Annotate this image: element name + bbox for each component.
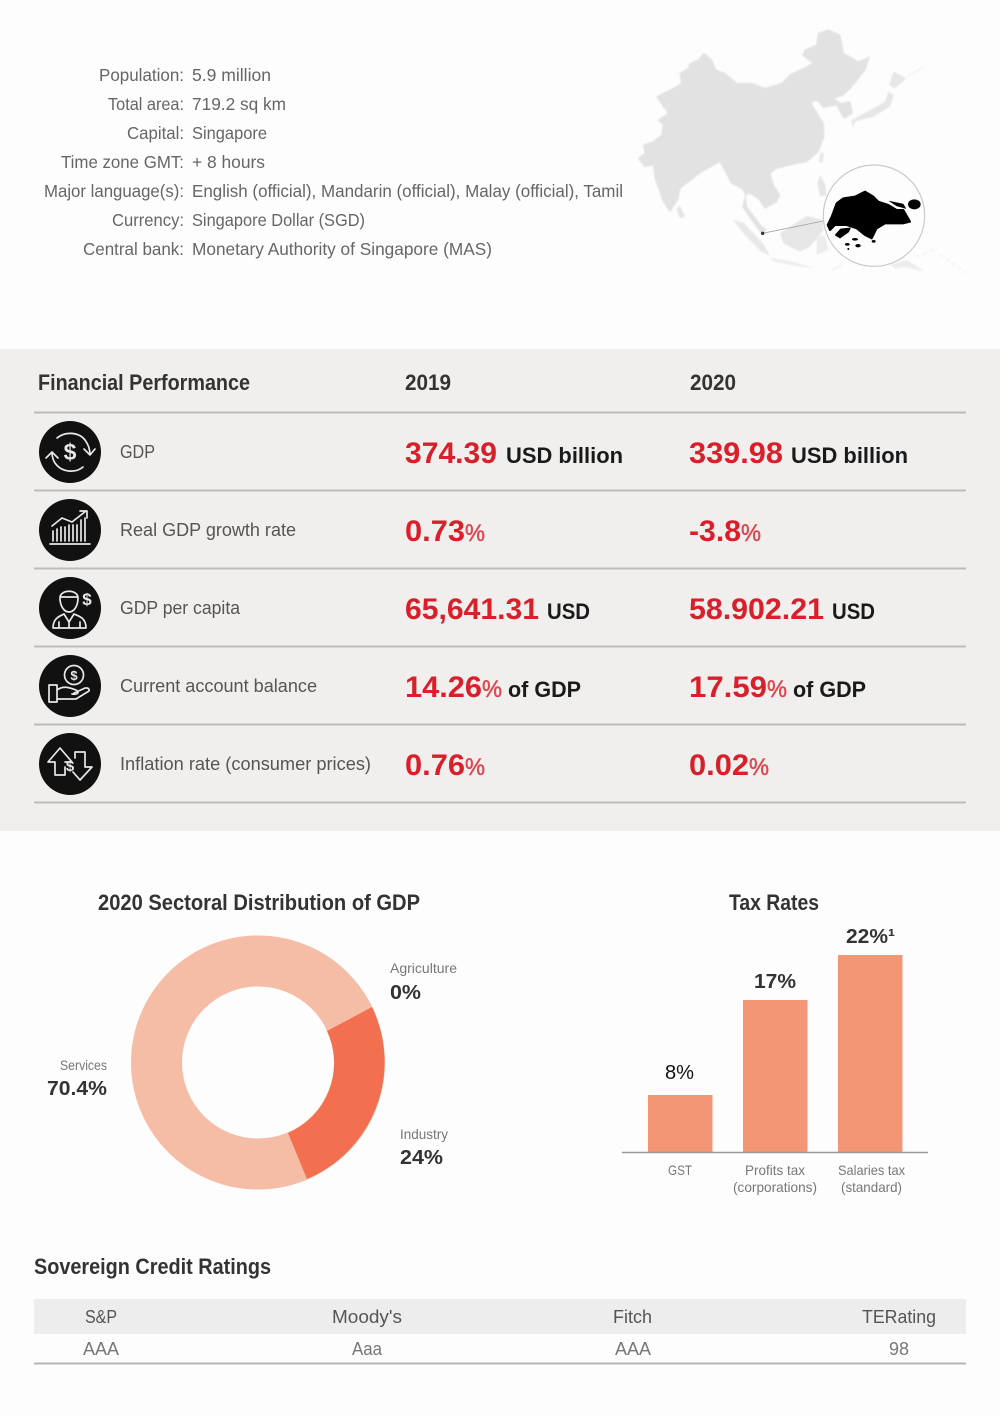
table header: Financial Performance [38, 370, 250, 395]
donut labels: Industry [400, 1126, 448, 1142]
row: real GDP growth rate: 0.73 [405, 515, 465, 548]
table: credit ratings: AAA [615, 1339, 651, 1359]
row: GDP: USD billion [506, 443, 623, 468]
row: current account balance: 14.26 [405, 671, 482, 704]
row: real GDP growth rate: Real GDP growth rate [120, 520, 296, 540]
row: inflation rate: % [465, 754, 485, 781]
panel: financial performance [0, 349, 1000, 831]
bar chart: tax rates: Salaries tax [838, 1162, 905, 1178]
country facts: 719.2 sq km [192, 94, 286, 114]
table: credit ratings: S&P [85, 1307, 117, 1327]
country facts [44, 65, 623, 259]
table: credit ratings [34, 1299, 966, 1364]
table header [38, 370, 736, 395]
bar chart: tax rates: (standard) [841, 1179, 902, 1195]
country facts: Currency: [112, 210, 184, 230]
donut labels: 0% [390, 982, 421, 1004]
heading: sovereign credit ratings: Sovereign Credit Ratings [34, 1254, 271, 1279]
row: inflation rate [39, 733, 769, 795]
country facts: Major language(s): [44, 181, 184, 201]
table: credit ratings: Fitch [613, 1307, 652, 1327]
table header: 2019 [405, 370, 451, 395]
icon: dollar cycle [39, 421, 101, 483]
row: current account balance: Current account balance [120, 676, 317, 696]
bar chart: tax rates: 8% [665, 1062, 694, 1084]
icon: hand holding coin [39, 655, 101, 717]
country facts: Singapore [192, 123, 267, 143]
row: real GDP growth rate [39, 499, 761, 561]
country facts: Total area: [108, 94, 184, 114]
row: GDP per capita [39, 577, 875, 639]
table header: 2020 [690, 370, 736, 395]
bar chart: tax rates: 17% [754, 971, 796, 993]
row: GDP per capita: GDP per capita [120, 598, 241, 618]
row: GDP per capita: USD [832, 599, 875, 624]
icon: growth chart [39, 499, 101, 561]
donut labels: 24% [400, 1147, 443, 1169]
heading: sectoral distribution: 2020 Sectoral Distribution of GDP [98, 890, 420, 915]
icon: dollar cycle: $ [64, 439, 77, 465]
row: real GDP growth rate: % [465, 520, 485, 547]
row: GDP: 374.39 [405, 437, 497, 470]
table: credit ratings: TERating [862, 1307, 936, 1327]
row: GDP: USD billion [791, 443, 908, 468]
table: credit ratings: Moody's [332, 1307, 402, 1327]
row: current account balance: 17.59 [689, 671, 767, 704]
table: credit ratings: Aaa [352, 1339, 383, 1359]
country facts: Capital: [127, 123, 184, 143]
bar chart: tax rates: GST [668, 1162, 692, 1178]
row: inflation rate: 0.02 [689, 749, 749, 782]
table: credit ratings: 98 [889, 1339, 909, 1359]
row: real GDP growth rate: % [741, 520, 761, 547]
icon: up and down arrows with dollar: $ [66, 758, 75, 775]
row: inflation rate: 0.76 [405, 749, 465, 782]
row: current account balance: of GDP [793, 677, 866, 702]
row: current account balance: % [482, 676, 502, 703]
row: GDP [39, 421, 908, 483]
bar chart: tax rates: 22%¹ [846, 926, 895, 948]
row: current account balance: of GDP [508, 677, 581, 702]
row: GDP: 339.98 [689, 437, 783, 470]
country facts: Time zone GMT: [61, 152, 184, 172]
country facts: 5.9 million [192, 65, 271, 85]
donut labels: 70.4% [47, 1078, 107, 1100]
bar chart: tax rates [622, 926, 928, 1195]
row: GDP: GDP [120, 442, 155, 462]
heading: tax rates: Tax Rates [729, 890, 819, 915]
country facts: Monetary Authority of Singapore (MAS) [192, 239, 492, 259]
row: current account balance [39, 655, 866, 717]
row: GDP per capita: USD [547, 599, 590, 624]
icon: business person: $ [82, 590, 92, 609]
country facts: English (official), Mandarin (official), Malay (official), Tamil [192, 181, 623, 201]
row: GDP per capita: 58.902.21 [689, 593, 824, 626]
country facts: Singapore Dollar (SGD) [192, 210, 365, 230]
leader line [761, 221, 823, 235]
inset circle [823, 165, 925, 266]
donut labels: Agriculture [390, 960, 457, 976]
row: current account balance: % [767, 676, 787, 703]
row: GDP per capita: 65,641.31 [405, 593, 539, 626]
map of Asia with Singapore inset [638, 30, 967, 273]
icon: up and down arrows with dollar [39, 733, 101, 795]
icon: hand holding coin: $ [70, 668, 78, 683]
row: inflation rate: % [749, 754, 769, 781]
country facts: + 8 hours [192, 152, 265, 172]
row: inflation rate: Inflation rate (consumer prices) [120, 754, 371, 774]
row: real GDP growth rate: -3.8 [689, 515, 741, 548]
donut labels: Services [60, 1057, 107, 1073]
donut labels [47, 960, 457, 1169]
table: credit ratings: AAA [83, 1339, 119, 1359]
country facts: Central bank: [83, 239, 184, 259]
icon: business person [39, 577, 101, 639]
Singapore silhouette [828, 192, 921, 250]
country facts: Population: [99, 65, 184, 85]
donut chart [156, 961, 385, 1179]
bar chart: tax rates: (corporations) [733, 1179, 817, 1195]
bar chart: tax rates: Profits tax [745, 1162, 805, 1178]
